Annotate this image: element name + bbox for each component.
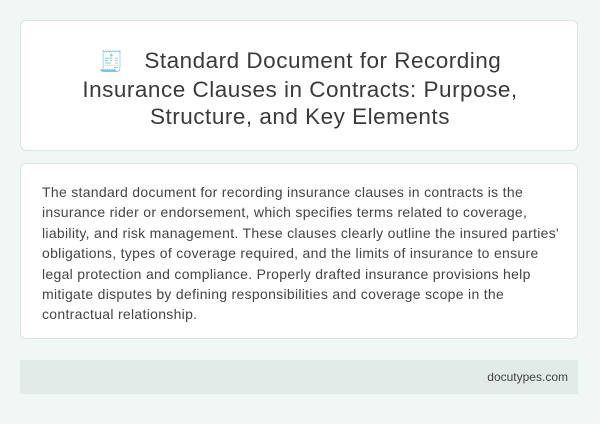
footer source: docutypes.com xyxy=(487,370,568,384)
description text: The standard document for recording insurance clauses in contracts is the insurance rider or endorsement, which specifies terms related to coverage, liability, and risk management. These clauses clearly outline the insured parties' obligations, types of coverage required, and the limits of insurance to ensure legal protection and compliance. Properly drafted insurance provisions help mitigate disputes by defining responsibilities and coverage scope in the contractual relationship. xyxy=(42,184,559,322)
title: 🧾 Standard Document for Recording Insurance Clauses in Contracts: Purpose, Structure, and Key Elements xyxy=(82,48,518,129)
title panel xyxy=(20,20,578,151)
description panel xyxy=(20,163,578,339)
footer xyxy=(20,360,578,394)
